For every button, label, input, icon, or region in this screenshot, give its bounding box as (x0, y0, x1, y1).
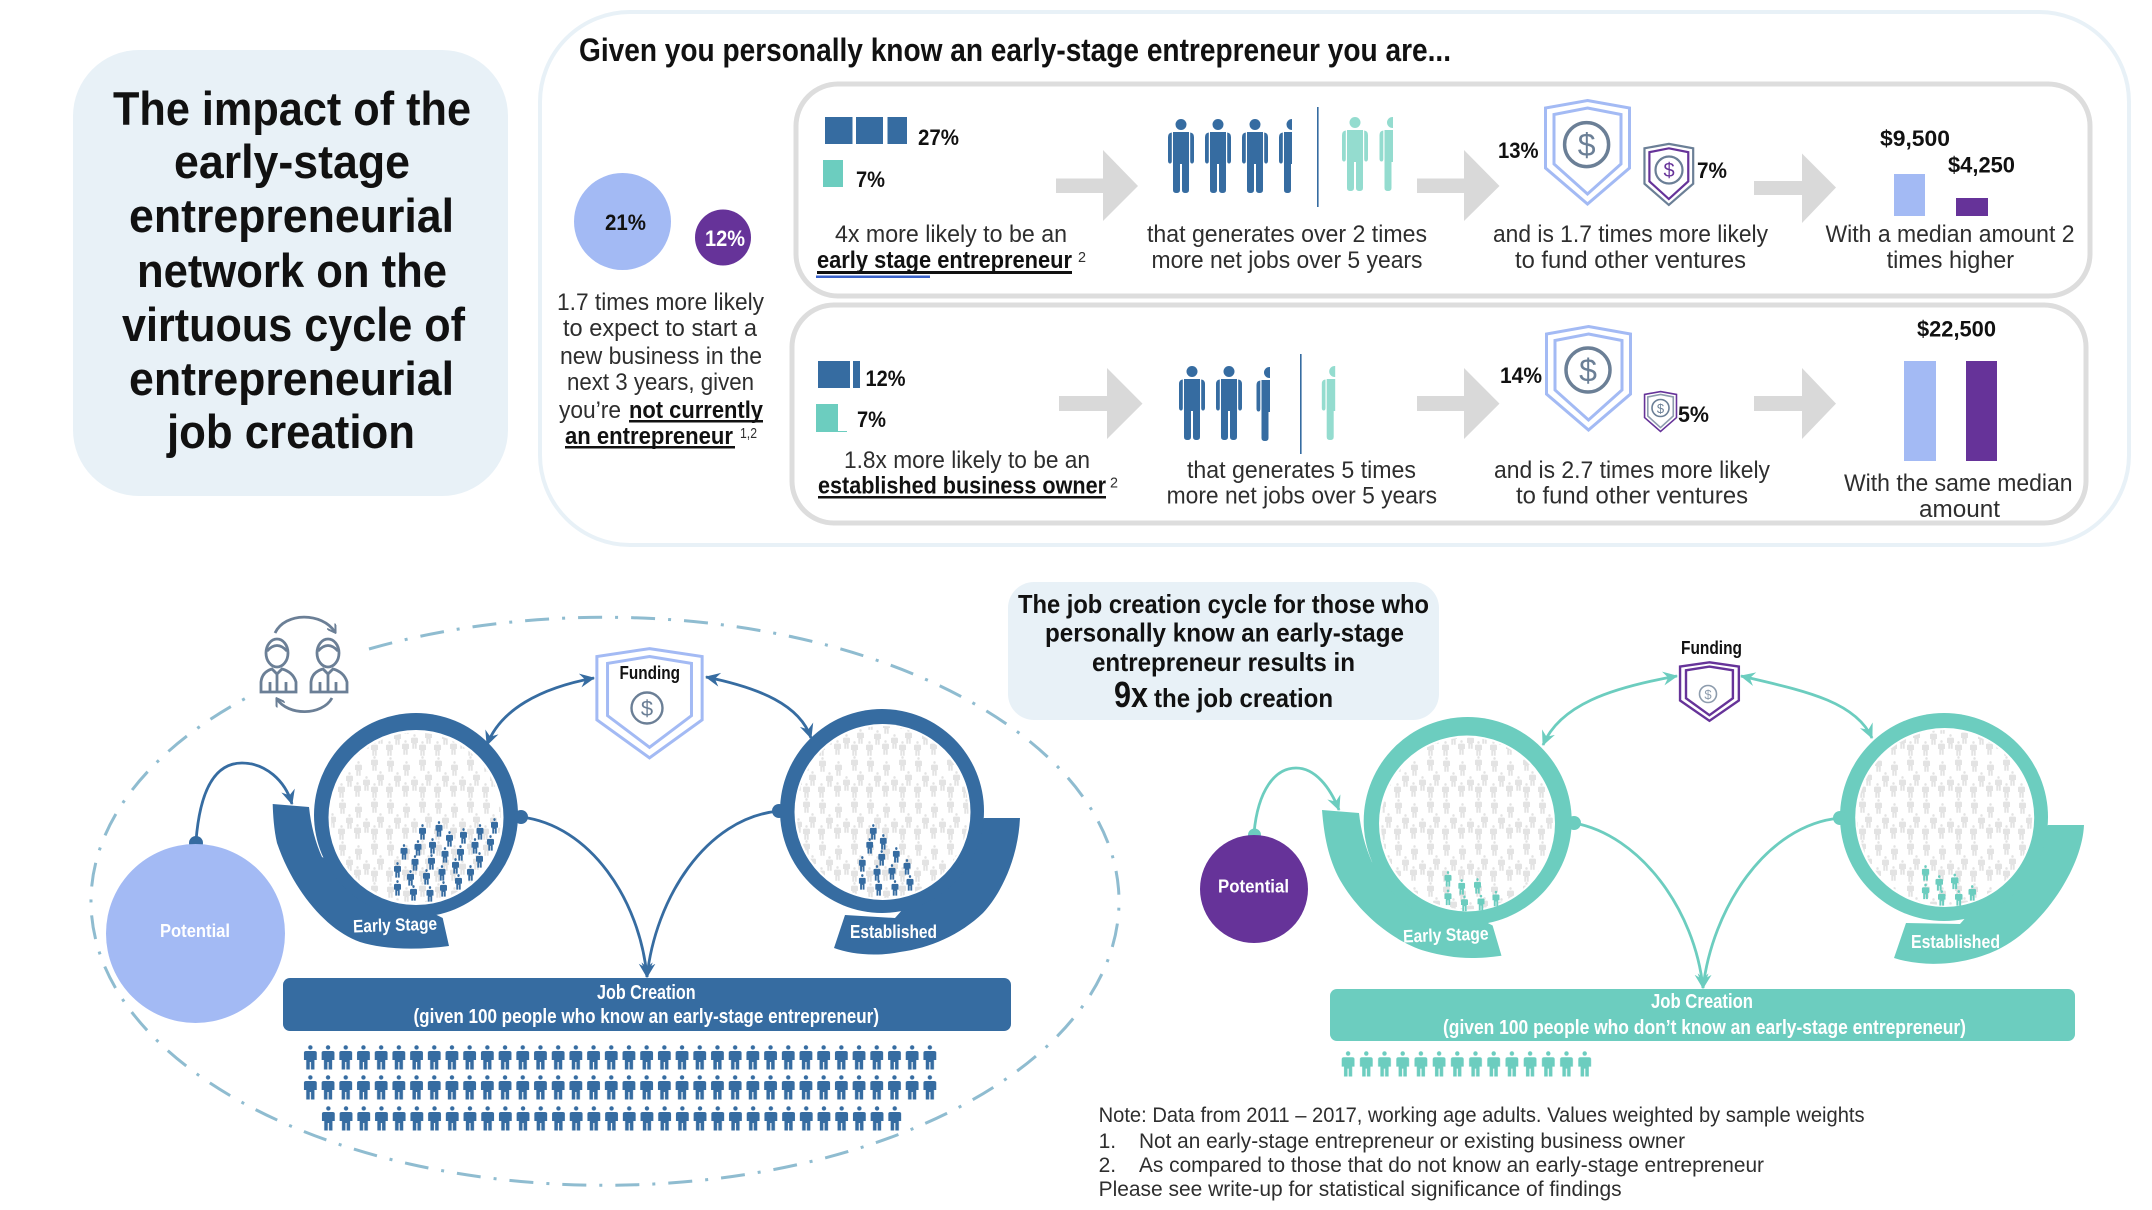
funding node (1680, 638, 1742, 721)
title panel (73, 50, 508, 496)
title: entrepreneurial (129, 189, 454, 242)
cycle diagram: know an early-stage entrepreneur (106, 649, 1020, 1131)
text: with a median amount: times higher (1887, 247, 2014, 274)
node: potential (106, 844, 285, 1023)
connector: potential to early stage (189, 763, 292, 850)
text: and is 1.7 times more likely: and is 1.7 times more likely (1493, 221, 1768, 248)
established colored people (859, 824, 914, 896)
funding node (597, 649, 702, 758)
job creation bar (1330, 989, 2075, 1041)
cycle diagram: don't know an early-stage entrepreneur (1200, 638, 2084, 1077)
arrow (1417, 368, 1500, 439)
bar chart: median funding (1880, 126, 2015, 216)
funding node: Funding (1681, 638, 1742, 658)
text: 4x more likely: 4x more likely to be an (835, 221, 1067, 248)
note (1099, 1104, 1865, 1201)
panel: established business owner row (792, 305, 2086, 523)
arrows: funding links (1543, 676, 1872, 745)
icon: funding shields 13% vs 7%: $ (1663, 160, 1675, 182)
note: Not an early-stage entrepreneur or existing business owner (1139, 1130, 1685, 1153)
callout: 9x the job creation: The job creation cycle for those who (1018, 589, 1429, 619)
bar chart: median funding: $9,500 (1880, 126, 1950, 151)
callout: 9x the job creation: personally know an early-stage (1045, 618, 1404, 648)
text: 1.7 times more likely: you’re (559, 397, 621, 424)
text: and is 1.7 times more likely: to fund other ventures (1515, 247, 1746, 274)
node: early stage (273, 713, 518, 949)
title (113, 82, 471, 458)
bar icons: 12% vs 7% (816, 361, 906, 432)
title: early-stage (174, 135, 410, 188)
dashed ellipse: entrepreneurial network (91, 617, 1119, 1185)
job creation bar: Job Creation (597, 982, 696, 1004)
panel: early stage entrepreneur row (796, 84, 2090, 296)
text: and is 1.7 times more likely (1493, 221, 1768, 274)
arrows: funding links (487, 677, 811, 745)
note: Please see write-up for statistical significance of findings (1099, 1178, 1622, 1201)
text: 1.7 times more likely: not currently (629, 397, 764, 424)
note: As compared to those that do not know an early-stage entrepreneur (1139, 1154, 1764, 1177)
arrow (1056, 150, 1138, 221)
icon: funding shields 14% vs 5% (1500, 326, 1709, 431)
text: that generates 5 times: more net jobs over 5 years (1167, 483, 1437, 510)
text: with the same median: With the same median (1844, 470, 2073, 497)
title: job creation (166, 405, 415, 458)
node: early stage: Early Stage (1403, 923, 1489, 946)
text: with the same median: amount (1919, 496, 2000, 523)
text: 4x more likely: early stage entrepreneur (817, 247, 1072, 274)
connector: potential to early stage (1248, 768, 1339, 842)
icon: funding shields 13% vs 7%: 7% (1697, 158, 1727, 183)
text: 1.7 times more likely: new business in the (560, 343, 762, 370)
icon: two people exchanging (261, 617, 347, 712)
heading: Given you personally know an early-stage entrepreneur you are... (579, 32, 1451, 68)
text: with a median amount: With a median amount 2 (1826, 221, 2074, 248)
text: that generates 5 times (1167, 457, 1437, 510)
title: The impact of the (113, 82, 471, 135)
people row: jobs created (1339, 1051, 1594, 1077)
text: 1.7 times more likely: next 3 years, given (567, 369, 754, 396)
bubble chart: expect to start a business (574, 173, 751, 270)
text: that generates 5 times: that generates 5 times (1187, 457, 1416, 484)
bar icons: 12% vs 7%: 12% (866, 366, 906, 391)
text: that generates over 2 times: that generates over 2 times (1147, 221, 1427, 248)
bar icons: 27% vs 7%: 7% (856, 167, 885, 192)
text: that generates over 2 times (1147, 221, 1427, 274)
node: established: Established (850, 922, 937, 942)
node: potential: Potential (1218, 877, 1289, 897)
icon: funding shields 14% vs 5%: $ (1579, 352, 1597, 388)
icon: funding shields 14% vs 5%: $ (1657, 401, 1665, 416)
icon: funding shields 13% vs 7%: $ (1578, 127, 1596, 163)
funding node: $ (641, 696, 653, 721)
funding node: $ (1704, 687, 1712, 702)
bar chart: same median: $22,500 (1917, 316, 1996, 342)
arrow (1754, 368, 1836, 439)
text: with a median amount (1826, 221, 2074, 274)
text: 1.7 times more likely: to expect to start a (563, 315, 758, 342)
text: 1.7 times more likely (557, 289, 764, 450)
callout: 9x the job creation: the job creation (1154, 683, 1333, 713)
node: established: Established (1911, 932, 2000, 952)
arrows: to job creation (514, 804, 786, 977)
node: established (1840, 713, 2084, 964)
bar icons: 27% vs 7% (823, 117, 959, 192)
job creation bar: (given 100 people who don’t know an early-stage entrepreneur) (1443, 1017, 1966, 1039)
icon: funding shields 14% vs 5%: 14% (1500, 363, 1542, 388)
arrow (1417, 150, 1500, 221)
text: 1.8x more likely: established business owner (818, 472, 1106, 500)
text: 1.7 times more likely: 1.7 times more likely (557, 289, 764, 316)
callout: 9x the job creation: 9x (1114, 674, 1148, 715)
callout: 9x the job creation: entrepreneur results in (1092, 647, 1355, 677)
title: virtuous cycle of (122, 298, 465, 351)
bar chart: same median (1904, 316, 1997, 461)
node: early stage (1322, 717, 1572, 958)
node: potential (1200, 835, 1308, 943)
note: 1. (1099, 1130, 1116, 1153)
early stage colored people (1444, 871, 1500, 911)
bar chart: median funding: $4,250 (1948, 152, 2015, 178)
text: 1.8x more likely: 1.8x more likely to be an (844, 447, 1090, 474)
job creation bar: (given 100 people who know an early-stage entrepreneur) (414, 1006, 879, 1028)
text: 1.7 times more likely: an entrepreneur (565, 423, 733, 450)
node: established (780, 709, 1020, 955)
arrow (1754, 154, 1836, 223)
icon: funding shields 14% vs 5%: 5% (1678, 402, 1709, 427)
bar icons: 12% vs 7%: 7% (857, 407, 886, 432)
text: and is 2.7 times more likely: to fund other ventures (1516, 483, 1748, 510)
note: 2. (1099, 1154, 1116, 1177)
text: 1.7 times more likely: 1,2 (740, 425, 757, 442)
text: 1.8x more likely: 2 (1110, 474, 1118, 492)
bubble chart: expect to start a business: 12% (705, 226, 745, 251)
title: network on the (137, 244, 447, 297)
job creation bar (283, 978, 1011, 1031)
arrows: to job creation (1567, 811, 1847, 988)
panel: given you personally know (540, 12, 2129, 545)
text: 4x more likely: 2 (1078, 249, 1086, 266)
title: entrepreneurial (129, 352, 454, 405)
text: 4x more likely (816, 221, 1086, 278)
text: with the same median (1844, 470, 2073, 523)
text: that generates over 2 times: more net jobs over 5 years (1152, 247, 1422, 274)
bubble chart: expect to start a business: 21% (605, 210, 646, 235)
established colored people (1922, 865, 1976, 906)
early stage colored people (394, 818, 498, 902)
icon: funding shields 13% vs 7%: 13% (1498, 138, 1539, 163)
text: and is 2.7 times more likely: and is 2.7 times more likely (1494, 457, 1770, 484)
people rows: jobs created (302, 1045, 939, 1131)
icon: funding shields 13% vs 7% (1498, 100, 1727, 205)
bar icons: 27% vs 7%: 27% (918, 125, 959, 150)
people icons: job generation (1179, 354, 1348, 454)
node: early stage: Early Stage (353, 914, 437, 936)
callout: 9x the job creation (1008, 582, 1439, 720)
text: 1.8x more likely (818, 447, 1118, 500)
arrow (1059, 368, 1142, 439)
funding node: Funding (620, 663, 680, 683)
text: and is 2.7 times more likely (1494, 457, 1770, 510)
note: Note: Data from 2011 – 2017, working age adults. Values weighted by sample weights (1099, 1104, 1865, 1127)
job creation bar: Job Creation (1651, 991, 1753, 1013)
node: potential: Potential (160, 921, 230, 941)
people icons: job generation (1168, 107, 1406, 207)
